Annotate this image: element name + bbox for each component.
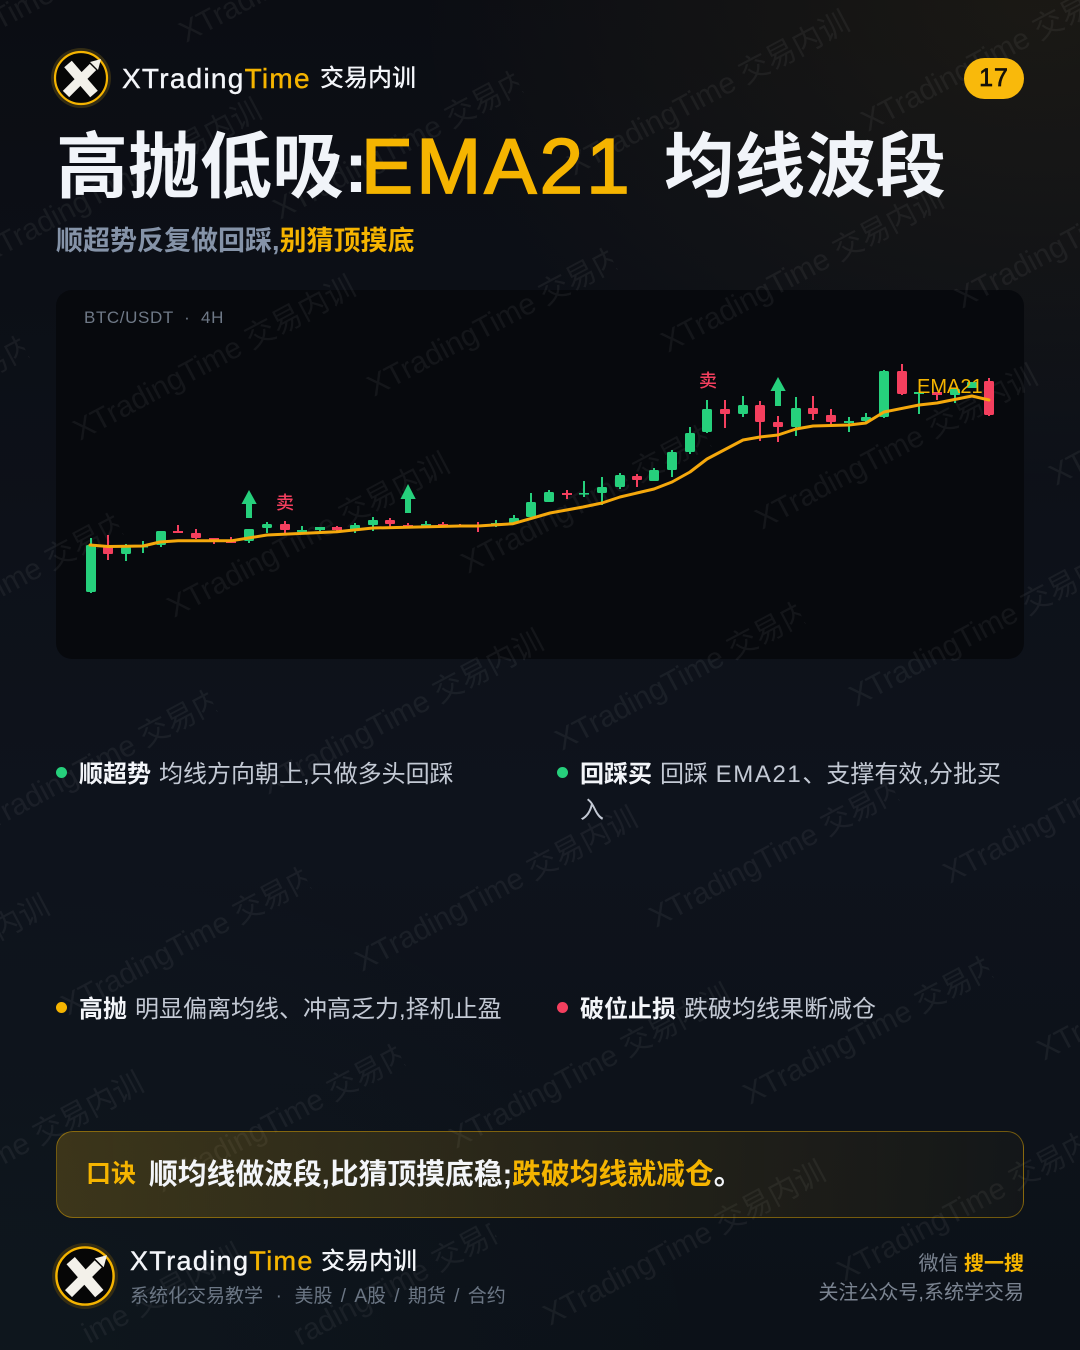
page number badge: 17 — [979, 64, 1009, 92]
footer follow text: 关注公众号,系统学交易 — [818, 1282, 1024, 1304]
watermark pattern: ime 交易内训 — [77, 1238, 248, 1350]
watermark pattern: XTradingTime 交易内训 — [562, 5, 855, 182]
page number badge — [964, 58, 1024, 99]
title: 高抛低吸: — [56, 128, 368, 208]
watermark pattern: XTradingTime 交易内训 — [738, 934, 1031, 1111]
header brand chinese: 交易内训 — [320, 65, 416, 92]
EMA21 line — [90, 396, 989, 546]
footer brand chinese: 交易内训 — [321, 1248, 417, 1275]
red candles — [103, 364, 994, 560]
green candles — [86, 370, 977, 593]
watermark pattern: XTradingTime 交易内训 — [644, 757, 937, 934]
footer wechat: 微信 搜一搜 — [918, 1253, 1024, 1275]
bullet: sell high: 高抛 明显偏离均线、冲高乏力,择机止盈 — [79, 996, 502, 1023]
callout text: 顺均线做波段,比猜顶摸底稳;跌破均线就减仓。 — [149, 1159, 743, 1191]
title: EMA21 — [361, 122, 633, 210]
panel: chart — [56, 290, 1024, 659]
arrow: buy 2 — [400, 484, 416, 513]
chart label: BTC/USDT · 4H — [84, 308, 224, 327]
watermark pattern: XTradingTime 交易内训 — [550, 580, 843, 757]
bullet: pullback buy: 回踩买 回踩 EMA21、支撑有效,分批买 — [580, 761, 1001, 788]
bullet: pullback buy: 入 — [580, 797, 604, 824]
footer tagline: 系统化交易教学 · 美股 / A股 / 期货 / 合约 — [130, 1286, 506, 1307]
sell label 2: 卖 — [699, 371, 717, 391]
callout label: 口诀 — [86, 1160, 136, 1188]
title — [56, 122, 946, 210]
watermark pattern: XTradingTime 交易内训 — [444, 978, 737, 1155]
watermark pattern: XTradingTime 交易内训 — [268, 49, 561, 226]
watermark pattern: XTradingTime 交易内训 — [656, 182, 949, 359]
watermark pattern: XTradingTime 交易内训 — [750, 359, 1043, 536]
watermark pattern: XTradingTime 交易内训 — [362, 226, 655, 403]
header brand: XTradingTime — [122, 63, 311, 94]
arrow: buy 1 — [242, 490, 257, 518]
arrow: buy 3 — [770, 377, 786, 406]
title: 均线波段 — [664, 127, 946, 206]
sell label 1: 卖 — [276, 493, 294, 513]
EMA21 label: EMA21 — [917, 376, 983, 398]
watermark pattern: XTradingTime 交易内训 — [68, 270, 361, 447]
callout — [56, 1131, 1024, 1218]
watermark pattern: XTradingTime 交易内训 — [350, 801, 643, 978]
watermark pattern: XTradingTime 交易内训 — [150, 1022, 443, 1199]
watermark pattern: XTradingTime 交易内训 — [256, 624, 549, 801]
watermark pattern: radingTime 交易内训 — [288, 1193, 548, 1350]
bullet: stop loss: 破位止损 跌破均线果断减仓 — [580, 996, 876, 1023]
footer brand: XTradingTime — [130, 1246, 314, 1276]
watermark pattern: XTradingTime 交易内训 — [162, 447, 455, 624]
watermark pattern: XTradingTime 交易内训 — [538, 1155, 831, 1332]
watermark pattern: XTradingTime 交易内训 — [456, 403, 749, 580]
watermark pattern: XTradingTime 交易内训 — [56, 845, 349, 1022]
icon: footer logo — [52, 1243, 118, 1309]
bullet: trend: 顺超势 均线方向朝上,只做多头回踩 — [79, 761, 454, 788]
candlestick chart — [86, 364, 994, 593]
icon: header logo — [51, 48, 111, 108]
subtitle: 顺超势反复做回踩,别猜顶摸底 — [56, 226, 415, 256]
bullet: pullback buy — [557, 761, 1001, 824]
